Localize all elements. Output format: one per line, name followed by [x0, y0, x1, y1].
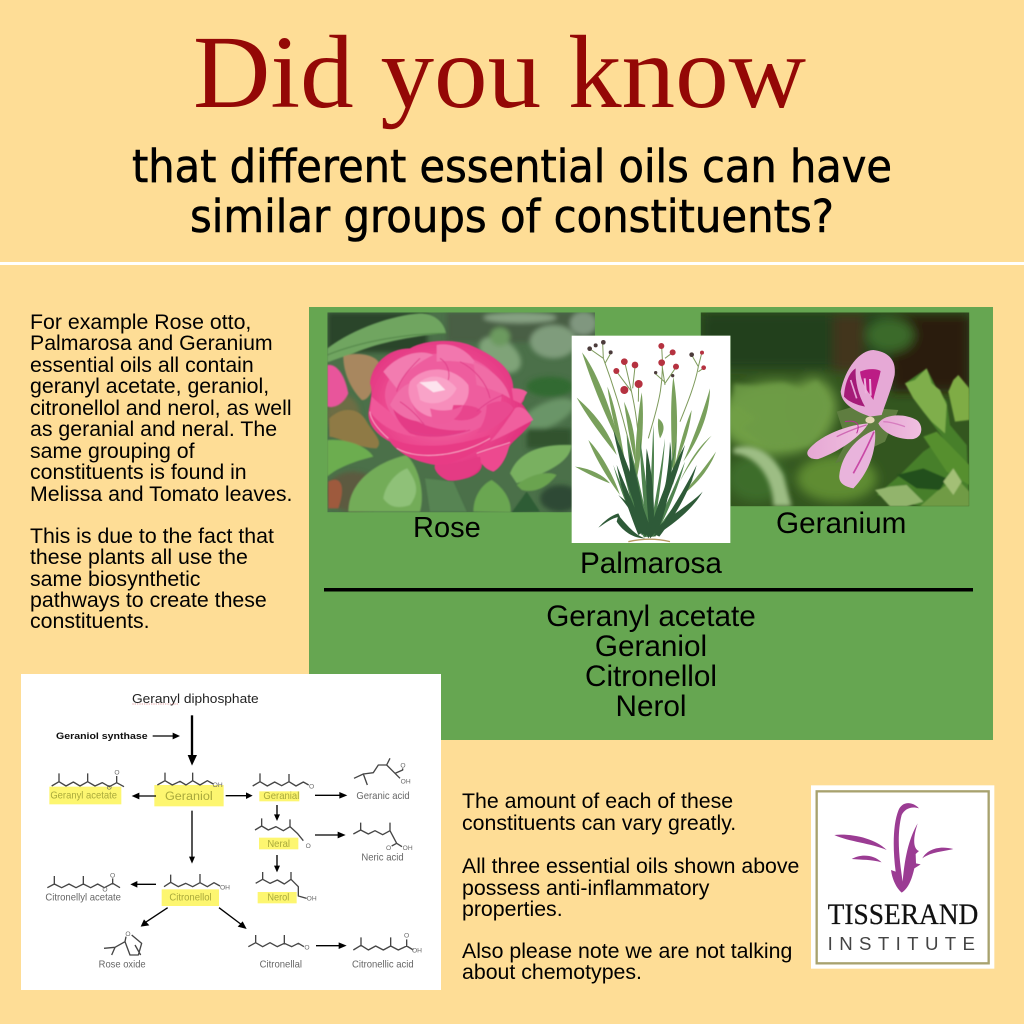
text block: intro: constituents is found in	[30, 460, 247, 484]
yellow highlights	[49, 785, 299, 906]
title: Did you know	[193, 15, 806, 130]
flower	[807, 350, 921, 488]
diagram: biosynthetic pathway	[21, 674, 441, 990]
mid-green leaf mass	[613, 425, 693, 537]
label: Palmarosa: Palmarosa	[580, 547, 722, 580]
text block: notes: constituents can vary greatly.	[462, 811, 736, 835]
subtitle	[132, 140, 892, 243]
dried buds	[343, 354, 380, 400]
diagram: biosynthetic pathway: Nerol	[267, 893, 289, 904]
text block: notes: All three essential oils shown above	[462, 854, 799, 878]
text block: intro: pathways to create these	[30, 588, 267, 612]
diagram labels	[45, 762, 422, 970]
diagram labels: Neric acid	[361, 852, 404, 863]
text block: notes: The amount of each of these	[462, 789, 733, 813]
logo: Tisserand Institute: TISSERAND	[828, 898, 978, 931]
subtitle: that different essential oils can have	[132, 140, 892, 193]
text block: intro: citronellol and nerol, as well	[30, 396, 292, 420]
icon: purple plant	[834, 803, 953, 893]
text block: notes: about chemotypes.	[462, 960, 642, 984]
diagram labels: Geranic acid	[356, 791, 410, 802]
leaf top left	[327, 313, 446, 362]
panel: plants	[309, 307, 993, 740]
text block: notes	[462, 789, 799, 984]
text block: intro: geranyl acetate, geraniol,	[30, 374, 269, 398]
diagram labels: OH	[401, 778, 411, 785]
arrows	[137, 715, 340, 946]
diagram labels: O	[110, 872, 115, 879]
buds	[613, 343, 706, 394]
photo: rose	[327, 312, 597, 512]
text block: intro: same grouping of	[30, 439, 195, 463]
diagram labels: O	[107, 784, 112, 791]
diagram labels: Citronellic acid	[352, 959, 414, 970]
diagram labels: O	[125, 931, 131, 938]
text block: notes: properties.	[462, 897, 563, 921]
list: constituents: Nerol	[616, 690, 686, 723]
diagram: biosynthetic pathway: Geraniol synthase	[56, 731, 148, 741]
list: constituents: Geraniol	[595, 630, 707, 663]
diagram labels: Rose oxide	[99, 959, 146, 970]
diagram: biosynthetic pathway: Geranyl acetate	[50, 791, 117, 802]
diagram: biosynthetic pathway: Neral	[267, 839, 290, 850]
photo: geranium	[701, 312, 970, 506]
diagram labels: OH	[307, 896, 317, 903]
leaves	[575, 352, 716, 497]
diagram labels: O	[102, 886, 108, 893]
list: constituents: Geranyl acetate	[546, 600, 756, 633]
diagram labels: O	[400, 762, 406, 769]
text block: intro: Melissa and Tomato leaves.	[30, 482, 292, 506]
list: constituents: Citronellol	[585, 660, 717, 693]
diagram labels: Citronellyl acetate	[45, 893, 121, 904]
illustration: palmarosa	[572, 336, 730, 543]
text block: notes: possess anti-inflammatory	[462, 876, 710, 900]
diagram labels: OH	[220, 885, 230, 892]
diagram labels: OH	[213, 782, 223, 789]
text block: intro: essential oils all contain	[30, 353, 254, 377]
label: Rose: Rose	[413, 512, 481, 544]
text block: intro: Palmarosa and Geranium	[30, 331, 273, 355]
text block: intro: For example Rose otto,	[30, 310, 251, 334]
diagram labels: O	[114, 770, 120, 777]
text block: intro: as geranial and neral. The	[30, 417, 277, 441]
diagram labels: O	[304, 944, 310, 951]
label: Geranium: Geranium	[776, 507, 906, 540]
diagram labels: OH	[412, 948, 422, 955]
list: constituents	[546, 600, 756, 723]
rose bloom	[368, 341, 533, 481]
text block: notes: Also please note we are not talking	[462, 939, 792, 963]
diagram: biosynthetic pathway: Geraniol	[165, 789, 213, 803]
diagram labels: O	[386, 845, 391, 852]
diagram: biosynthetic pathway: Geranyl diphosphate	[132, 691, 259, 706]
text block: intro: these plants all use the	[30, 545, 248, 569]
foliage right	[875, 368, 969, 506]
diagram: biosynthetic pathway: Citronellol	[169, 893, 212, 904]
logo: Tisserand Institute: INSTITUTE	[828, 933, 975, 954]
text block: intro: constituents.	[30, 609, 150, 633]
leaves bottom	[327, 440, 373, 477]
logo: Tisserand Institute	[811, 785, 994, 969]
subtitle: similar groups of constituents?	[190, 190, 834, 243]
diagram labels: O	[309, 784, 314, 791]
molecules	[47, 758, 413, 955]
diagram: biosynthetic pathway: Geranial	[263, 791, 299, 802]
text block: intro: same biosynthetic	[30, 567, 201, 591]
text block: intro: This is due to the fact that	[30, 524, 274, 548]
diagram labels: O	[306, 843, 311, 850]
text block: intro	[30, 310, 292, 633]
stems	[590, 343, 703, 535]
diagram labels: Citronellal	[260, 959, 302, 970]
diagram labels: O	[404, 933, 409, 940]
diagram labels: OH	[403, 845, 413, 852]
